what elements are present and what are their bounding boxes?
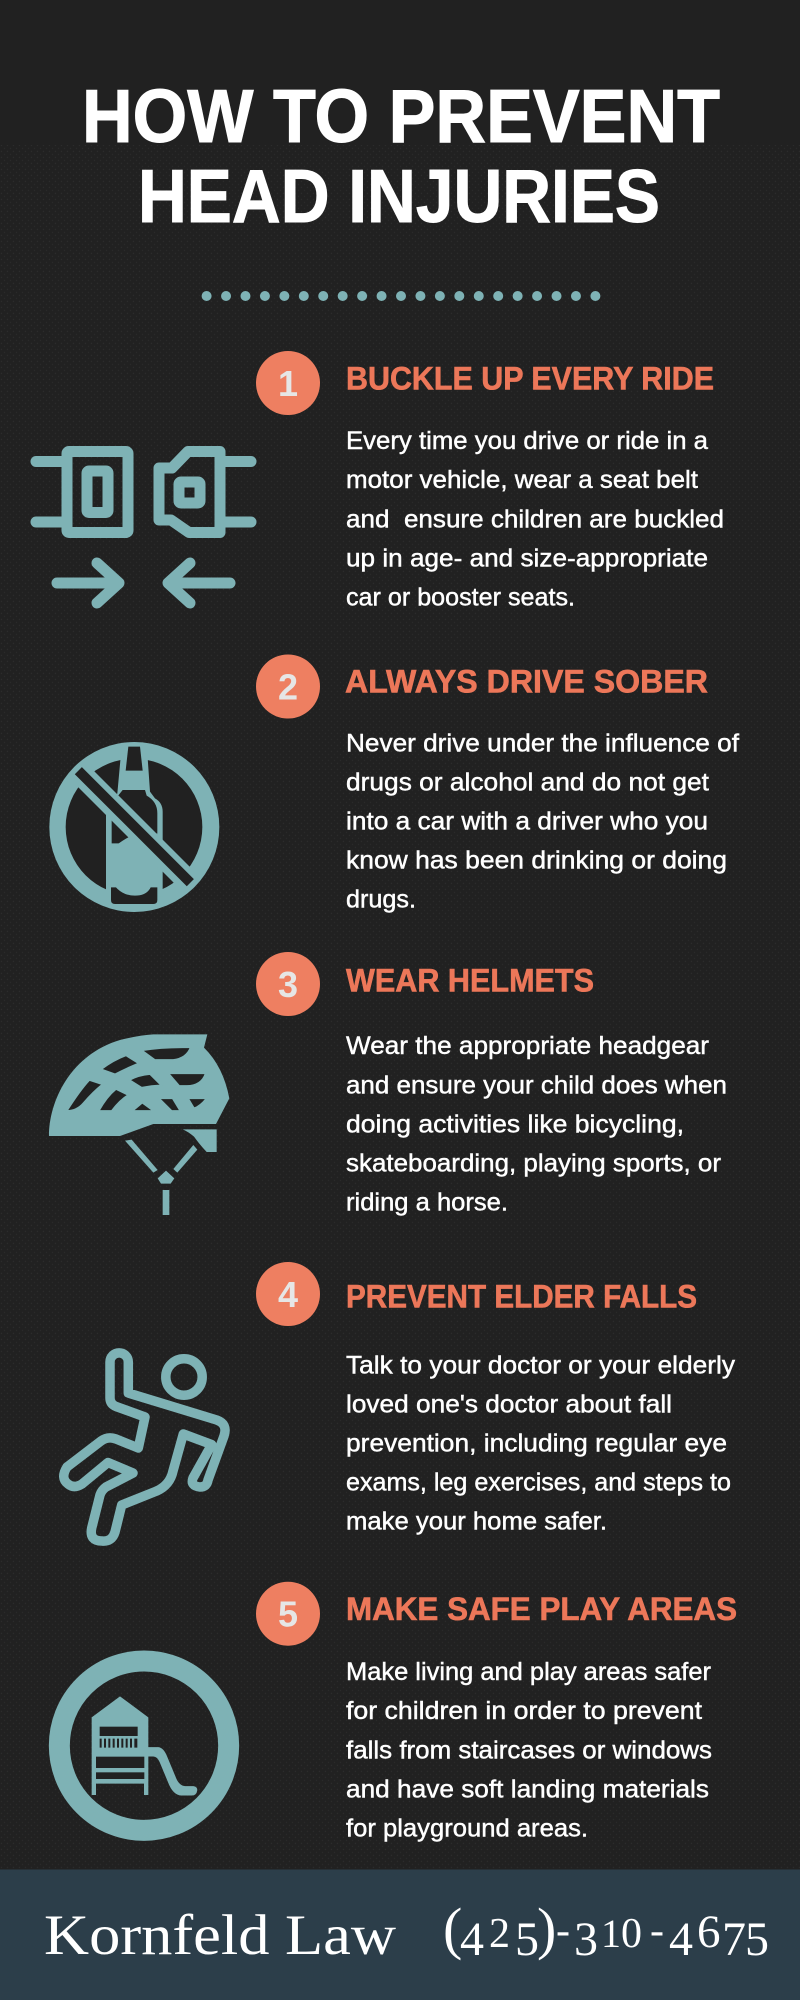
- text block: buckle up: motor vehicle, wear a seat belt: [346, 466, 698, 494]
- number badge 1: 1: [278, 363, 298, 404]
- phone number: -: [650, 1908, 664, 1954]
- phone number: 6: [697, 1906, 720, 1958]
- text block: buckle up: Every time you drive or ride in a: [346, 427, 708, 455]
- number badge 2: 2: [278, 666, 298, 708]
- number badge 3: 3: [278, 964, 298, 1005]
- icon: seat belt buckle with arrows: [36, 452, 251, 603]
- number badge 2: [256, 654, 320, 718]
- phone number: ): [537, 1896, 556, 1961]
- text block: elder falls: loved one's doctor about fall: [346, 1390, 672, 1418]
- text block: elder falls: Talk to your doctor or your elderly: [346, 1351, 736, 1379]
- title: HOW TO PREVENT: [82, 74, 720, 158]
- panel: prevent elder falls: [64, 1262, 736, 1541]
- heading: always drive sober: ALWAYS DRIVE SOBER: [345, 664, 708, 700]
- phone number: 2: [489, 1911, 510, 1957]
- phone number: 4: [460, 1913, 484, 1966]
- panel: wear helmets: [49, 952, 727, 1217]
- number badge 4: [256, 1262, 320, 1326]
- number badge 5: 5: [278, 1594, 298, 1634]
- text block: drive sober: drugs or alcohol and do not get: [346, 768, 709, 796]
- text block: drive sober: into a car with a driver who you: [346, 808, 708, 836]
- icon: crossed-out bottle: [49, 742, 219, 912]
- text block: play areas: [346, 1658, 712, 1842]
- number badge 5: [256, 1582, 320, 1646]
- phone number: 0: [621, 1911, 642, 1957]
- dotted divider: [207, 291, 596, 301]
- heading: prevent elder falls: PREVENT ELDER FALLS: [346, 1278, 697, 1314]
- phone number: 1: [601, 1911, 621, 1956]
- phone number: -: [556, 1908, 570, 1954]
- text block: helmets: and ensure your child does when: [346, 1071, 727, 1099]
- text block: play areas: for children in order to prevent: [346, 1697, 702, 1725]
- text block: buckle up: [346, 427, 724, 612]
- panel: buckle up every ride: [36, 351, 724, 612]
- phone number: 7: [722, 1913, 746, 1966]
- text block: helmets: doing activities like bicycling,: [346, 1110, 684, 1138]
- text block: elder falls: [346, 1351, 736, 1536]
- panel: always drive sober: [49, 654, 739, 914]
- text block: helmets: [346, 1032, 727, 1217]
- text block: drive sober: know has been drinking or doing: [346, 847, 727, 875]
- heading: make safe play areas: MAKE SAFE PLAY AREAS: [346, 1591, 737, 1627]
- firm name: Kornfeld Law: [44, 1904, 396, 1967]
- panel: make safe play areas: [59, 1582, 737, 1842]
- phone number: 5: [515, 1913, 539, 1966]
- text block: play areas: and have soft landing materials: [346, 1775, 709, 1803]
- number badge 3: [256, 952, 320, 1016]
- heading: wear helmets: WEAR HELMETS: [346, 963, 594, 999]
- number badge 4: 4: [278, 1274, 298, 1315]
- number badge 1: [256, 351, 320, 415]
- text block: play areas: for playground areas.: [346, 1814, 588, 1842]
- phone number: 3: [574, 1913, 598, 1966]
- text block: helmets: riding a horse.: [346, 1189, 508, 1217]
- text block: buckle up: and ensure children are buckled: [346, 505, 724, 533]
- phone number: 5: [745, 1913, 769, 1966]
- title: [82, 74, 720, 238]
- phone number: (: [443, 1896, 462, 1961]
- icon: playground slide in ring: [59, 1661, 229, 1830]
- text block: drive sober: Never drive under the influence of: [346, 729, 739, 757]
- footer band: [0, 1870, 800, 2000]
- text block: elder falls: prevention, including regular eye: [346, 1430, 727, 1458]
- phone number: 4: [669, 1913, 693, 1966]
- text block: buckle up: up in age- and size-appropriate: [346, 545, 708, 573]
- text block: helmets: skateboarding, playing sports, or: [346, 1150, 721, 1178]
- text block: drive sober: drugs.: [346, 886, 416, 914]
- text block: play areas: Make living and play areas safer: [346, 1658, 711, 1686]
- text block: buckle up: car or booster seats.: [346, 584, 575, 612]
- icon: bicycle helmet: [49, 1034, 229, 1215]
- text block: elder falls: make your home safer.: [346, 1508, 607, 1536]
- text block: play areas: falls from staircases or windows: [346, 1736, 712, 1764]
- heading: buckle up every ride: BUCKLE UP EVERY RIDE: [346, 360, 714, 396]
- text block: drive sober: [346, 729, 739, 914]
- title: HEAD INJURIES: [138, 154, 660, 238]
- text block: helmets: Wear the appropriate headgear: [346, 1032, 709, 1060]
- text block: elder falls: exams, leg exercises, and steps to: [346, 1469, 731, 1497]
- icon: falling person: [64, 1353, 225, 1541]
